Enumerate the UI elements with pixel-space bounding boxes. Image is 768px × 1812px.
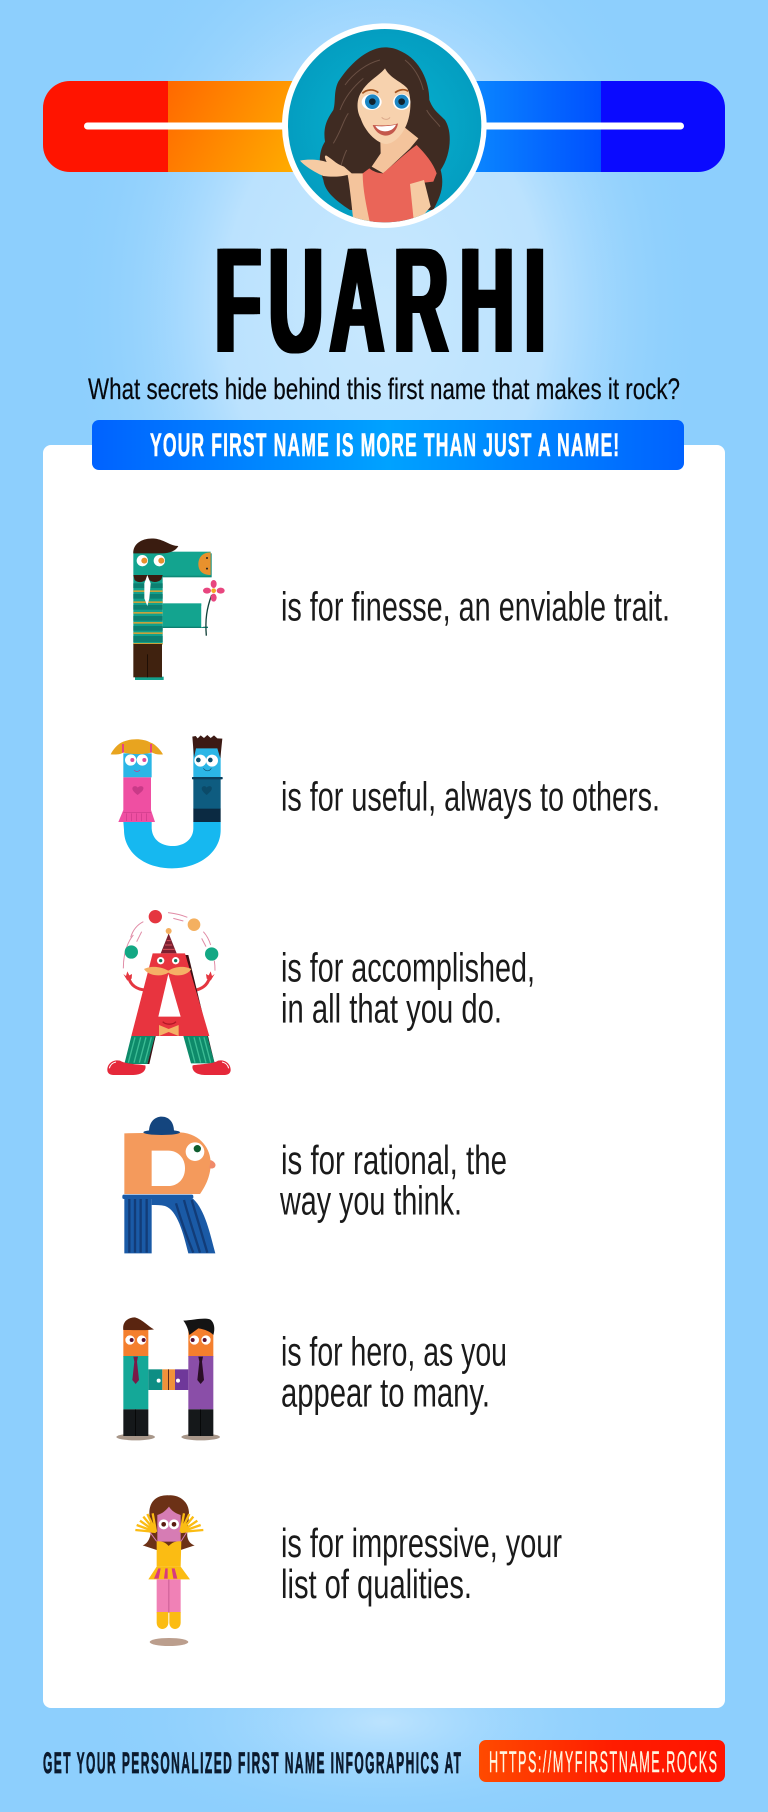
letter U illustration [111, 735, 223, 868]
title: H [459, 216, 514, 384]
blue segment [601, 81, 725, 172]
H line text [281, 1329, 507, 1416]
R line text: way you think. [279, 1178, 462, 1224]
I line text: list of qualities. [281, 1561, 472, 1607]
footer call to action: GET YOUR PERSONALIZED FIRST NAME INFOGRAPHICS AT [43, 1745, 461, 1780]
figure [300, 47, 450, 223]
A line text: is for accomplished, [281, 945, 535, 991]
white ring [282, 23, 487, 228]
white content panel [43, 445, 725, 1708]
A line text: in all that you do. [281, 986, 502, 1032]
letter F illustration [133, 538, 225, 680]
letter A illustration [107, 910, 231, 1075]
banner text: YOUR FIRST NAME IS MORE THAN JUST A NAME! [150, 429, 619, 463]
title [215, 216, 545, 384]
teal disc [288, 29, 481, 222]
title: F [215, 216, 261, 384]
white line [84, 122, 684, 130]
letter I illustration [135, 1495, 203, 1646]
title: A [330, 216, 384, 384]
H line text: is for hero, as you [281, 1329, 507, 1375]
letter H illustration [116, 1317, 220, 1440]
R line text [279, 1137, 507, 1224]
url text: HTTPS://MYFIRSTNAME.ROCKS [489, 1745, 717, 1779]
R line text: is for rational, the [281, 1137, 507, 1183]
red segment [43, 81, 168, 172]
I line text [281, 1520, 562, 1607]
orange segment [168, 81, 303, 172]
light blue segment [470, 81, 601, 172]
banner [92, 420, 684, 470]
H line text: appear to many. [281, 1370, 490, 1416]
I line text: is for impressive, your [281, 1520, 562, 1566]
A line text [281, 945, 535, 1032]
portrait: smiling woman in circle [282, 23, 487, 228]
title: I [525, 216, 545, 384]
title: U [268, 216, 323, 384]
letter R illustration [122, 1117, 216, 1253]
footer url button [479, 1740, 725, 1782]
title: R [393, 216, 448, 384]
header colour bar [43, 81, 725, 172]
